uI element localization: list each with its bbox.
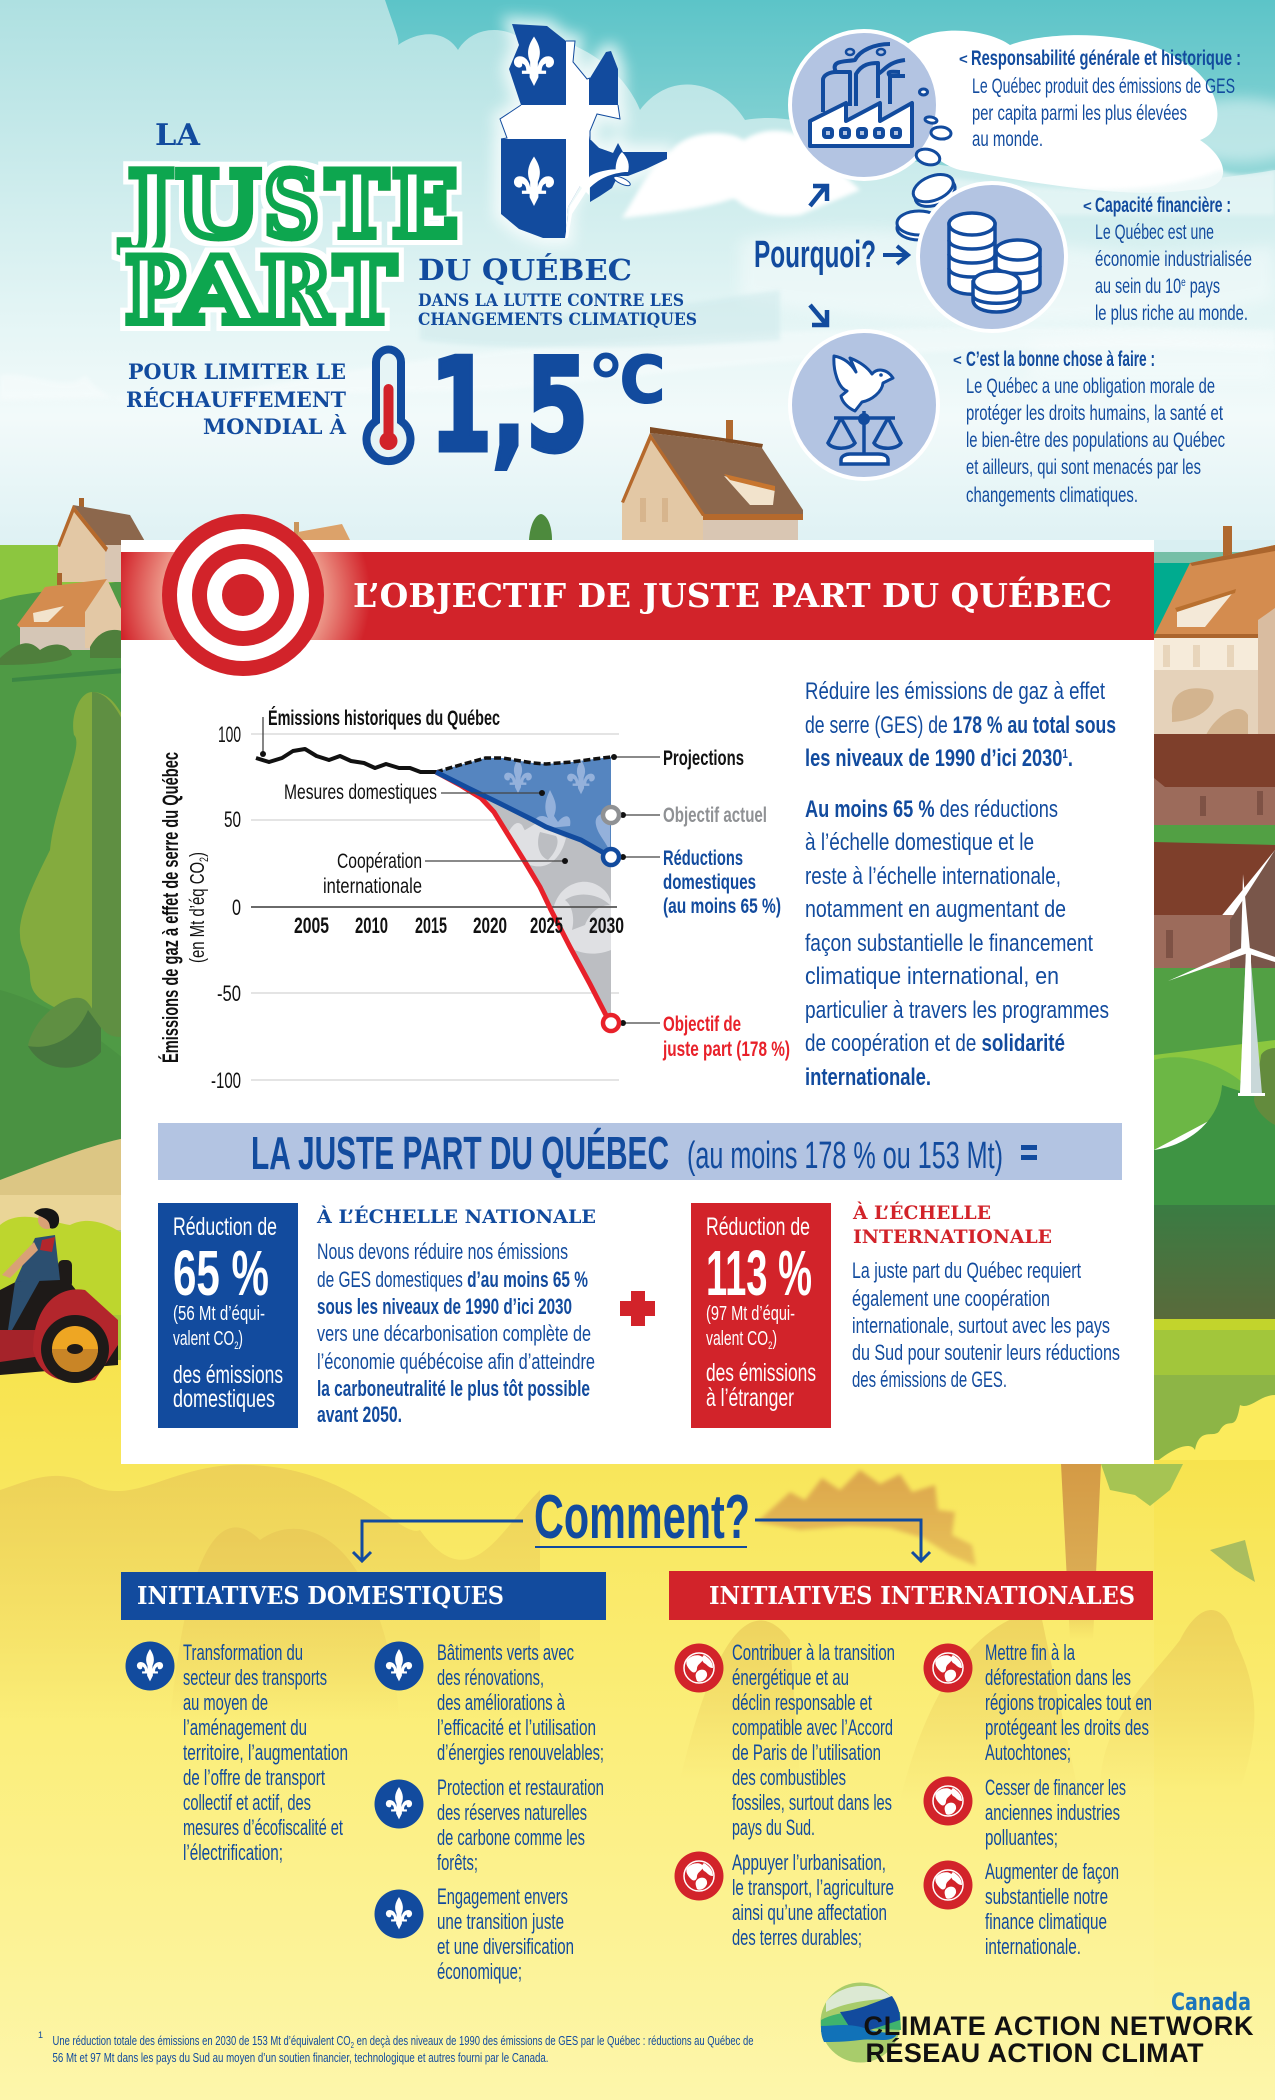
y axis values: -100 bbox=[211, 1068, 241, 1093]
right fields and farm bbox=[1150, 526, 1275, 1500]
text: transports: au moyen de bbox=[183, 1690, 268, 1715]
band: la juste part du québec: LA JUSTE PART DU QUÉBEC bbox=[251, 1127, 669, 1179]
text: transports: territoire, l’augmentation bbox=[183, 1740, 348, 1765]
text: responsabilité: au monde. bbox=[972, 128, 1043, 151]
title: part bbox=[125, 238, 396, 344]
footnote bbox=[38, 2030, 754, 2065]
line: projections bbox=[436, 757, 611, 772]
text: objective details: reste à l’échelle internationale, bbox=[805, 863, 1061, 890]
y axis values: -50 bbox=[217, 981, 241, 1006]
box: 65 % domestic: valent CO bbox=[173, 1328, 262, 1350]
arrow: to domestic initiatives bbox=[353, 1521, 523, 1561]
text: urbanisation: le transport, l’agriculture bbox=[732, 1875, 894, 1900]
text: transports: de l’offre de transport bbox=[183, 1765, 325, 1790]
icon: coin stacks circle bbox=[918, 183, 1066, 331]
house: central tan house bbox=[621, 420, 803, 540]
text: bâtiments verts bbox=[437, 1640, 604, 1765]
chart: emissions line chart: domestiques bbox=[663, 871, 756, 894]
text: à l'échelle nationale: la carboneutralité le plus tôt possible bbox=[317, 1376, 590, 1401]
text: objective details: Au moins 65 % des réductions bbox=[805, 796, 1058, 823]
box: 113 % abroad: des émissions bbox=[706, 1359, 816, 1387]
icon: fleur-de-lis 1 bbox=[126, 1642, 174, 1690]
chart: emissions line chart: Objectif actuel bbox=[663, 804, 767, 827]
y axis values: 100 bbox=[218, 722, 241, 747]
text: transports: l’électrification; bbox=[183, 1840, 283, 1865]
icon: Québec map flag bbox=[500, 24, 667, 238]
text: déforestation: Mettre fin à la bbox=[985, 1640, 1076, 1665]
text: transition énergétique bbox=[732, 1640, 895, 1840]
text: à l'échelle internationale: À L’ÉCHELLE bbox=[852, 1201, 991, 1224]
title: juste: J bbox=[120, 152, 174, 258]
icon: target bbox=[162, 514, 324, 676]
footnote: 56 Mt et 97 Mt dans les pays du Sud au moyen d’un soutien financier, technologique et autres fourni par le Canada. bbox=[52, 2051, 548, 2065]
header: initiatives internationales: INITIATIVES INTERNATIONALES bbox=[709, 1581, 1135, 1610]
logo text: RÉSEAU ACTION CLIMAT bbox=[866, 2037, 1204, 2068]
watermarks in chart bbox=[504, 759, 610, 852]
box: 113 % abroad: 2 bbox=[768, 1340, 772, 1352]
x axis years: 2020 bbox=[473, 913, 507, 938]
text: objective summary: les niveaux de 1990 d’ici 2030 bbox=[805, 745, 1144, 772]
text: à l'échelle internationale: internationale, surtout avec les pays bbox=[852, 1313, 1110, 1338]
text: transition juste: une transition juste bbox=[437, 1909, 564, 1934]
line: historical emissions bbox=[256, 749, 436, 772]
subtitle: dans la lutte: CHANGEMENTS CLIMATIQUES bbox=[418, 310, 697, 330]
banner heading: L’OBJECTIF DE JUSTE PART DU QUÉBEC bbox=[353, 575, 1112, 615]
band: la juste part du québec: (au moins 178 % ou 153 Mt) bbox=[687, 1135, 1003, 1177]
logo text: Canada bbox=[1171, 1988, 1251, 2016]
text: urbanisation: Appuyer l’urbanisation, bbox=[732, 1850, 886, 1875]
text: protection et restauration bbox=[437, 1775, 604, 1875]
box: 113 % abroad: Réduction de bbox=[706, 1213, 810, 1241]
text: à l'échelle internationale bbox=[852, 1201, 1120, 1392]
footnote: 2 bbox=[351, 2041, 354, 2050]
logo: Climate Action Network bbox=[820, 1982, 1254, 2068]
text: protection et restauration: Protection et restauration bbox=[437, 1775, 604, 1800]
box: 65 % domestic: Réduction de bbox=[173, 1213, 277, 1241]
text: déforestation: régions tropicales tout en bbox=[985, 1690, 1152, 1715]
bottom wheat field background bbox=[0, 1360, 1275, 2100]
footnote: 1 bbox=[38, 2030, 43, 2040]
text: objective summary: 1 bbox=[1062, 746, 1068, 761]
text: transports: secteur des transports bbox=[183, 1665, 327, 1690]
y axis title: ) bbox=[187, 852, 209, 857]
subtitle: du québec: DU QUÉBEC bbox=[418, 252, 632, 287]
x axis years: 2010 bbox=[355, 913, 388, 938]
text: à l'échelle internationale: également une coopération bbox=[852, 1286, 1050, 1311]
text: à l'échelle nationale: de GES domestiques d’au moins 65 % bbox=[317, 1267, 588, 1292]
text: transports: collectif et actif, des bbox=[183, 1790, 311, 1815]
icon: dove and scales circle bbox=[790, 331, 938, 479]
subtitle: dans la lutte bbox=[418, 291, 697, 330]
text: à l'échelle nationale: l’économie québécoise afin d’atteindre bbox=[317, 1349, 595, 1374]
text: capacité financière: < bbox=[1083, 198, 1092, 215]
text: déforestation: déforestation dans les bbox=[985, 1665, 1131, 1690]
icon: fleur-de-lis 3 bbox=[374, 1780, 424, 1828]
y axis values: 50 bbox=[224, 807, 241, 832]
red banner bbox=[121, 552, 1154, 640]
text: transition énergétique: déclin responsable et bbox=[732, 1690, 872, 1715]
text: industries polluantes: polluantes; bbox=[985, 1825, 1058, 1850]
chart: emissions line chart: Objectif de bbox=[663, 1013, 741, 1036]
title: juste: E bbox=[392, 152, 458, 258]
text: finance climatique bbox=[985, 1859, 1119, 1959]
icon: thermometer bbox=[367, 350, 411, 461]
chart: emissions line chart: Coopération bbox=[337, 850, 422, 873]
icon: coin trail bbox=[897, 89, 959, 240]
text: à l'échelle internationale: du Sud pour soutenir leurs réductions bbox=[852, 1340, 1120, 1365]
logo globe bbox=[820, 1982, 901, 2062]
box: 65 % domestic: domestiques bbox=[173, 1385, 275, 1413]
x axis years: 2030 bbox=[589, 913, 624, 938]
x axis years: 2005 bbox=[294, 913, 329, 938]
text: finance climatique: internationale. bbox=[985, 1934, 1081, 1959]
line: fair share target bbox=[436, 772, 610, 1023]
text: bonne chose à faire: < bbox=[953, 352, 962, 369]
text: objective summary: . bbox=[1068, 745, 1073, 772]
y axis title bbox=[158, 752, 211, 1063]
house: small roof behind panel bbox=[294, 522, 350, 540]
box: 65 % domestic: 65 % bbox=[173, 1237, 269, 1309]
text: objective details: notamment en augmentant de bbox=[805, 896, 1066, 923]
icon: plus sign bbox=[620, 1291, 655, 1326]
icon: globe 3 bbox=[924, 1644, 972, 1692]
text: transition énergétique: pays du Sud. bbox=[732, 1815, 815, 1840]
chart: emissions line chart: internationale bbox=[323, 875, 422, 898]
text: finance climatique: Augmenter de façon bbox=[985, 1859, 1119, 1884]
text: bâtiments verts: l’efficacité et l’utilisation bbox=[437, 1715, 596, 1740]
text: à l'échelle nationale: avant 2050. bbox=[317, 1402, 402, 1427]
icon: globe 5 bbox=[924, 1860, 972, 1910]
band: la juste part du québec bbox=[158, 1123, 1122, 1180]
text: à l'échelle nationale bbox=[316, 1205, 596, 1427]
title: juste bbox=[120, 152, 458, 258]
tree: top of tree behind panel bbox=[529, 514, 552, 540]
text: protection et restauration: de carbone comme les bbox=[437, 1825, 585, 1850]
icon: fleur-de-lis 2 bbox=[374, 1642, 424, 1690]
text: déforestation: Autochtones; bbox=[985, 1740, 1071, 1765]
header: initiatives domestiques bbox=[121, 1572, 606, 1620]
text: objective details: façon substantielle le financement bbox=[805, 930, 1093, 957]
text: industries polluantes: Cesser de financer les bbox=[985, 1775, 1126, 1800]
y axis title: Émissions de gaz à effet de serre du Québec bbox=[158, 752, 183, 1063]
text: objective details: internationale. bbox=[805, 1064, 931, 1091]
logo text bbox=[864, 1988, 1254, 2068]
text: déforestation: protégeant les droits des bbox=[985, 1715, 1149, 1740]
box: 113 % abroad bbox=[691, 1203, 831, 1428]
text: pour limiter: POUR LIMITER LE bbox=[128, 359, 346, 384]
text: pour limiter: RÉCHAUFFEMENT bbox=[126, 387, 346, 412]
box: 65 % domestic: ) bbox=[238, 1328, 243, 1350]
y axis title: (en Mt d’éq CO bbox=[187, 827, 209, 963]
x axis years bbox=[294, 913, 624, 938]
text: objective details: climatique international, en bbox=[805, 963, 1059, 990]
text: transports bbox=[183, 1640, 348, 1865]
text: finance climatique: finance climatique bbox=[985, 1909, 1107, 1934]
title: la: LA bbox=[155, 118, 201, 153]
chart: emissions line chart: Réductions bbox=[663, 847, 743, 870]
text: capacité financière: e bbox=[1181, 275, 1186, 289]
box: 113 % abroad: (97 Mt d’équi- bbox=[706, 1303, 795, 1325]
text: transition énergétique: des combustibles bbox=[732, 1765, 846, 1790]
text: bonne chose à faire: changements climatiques. bbox=[966, 484, 1138, 507]
text: transition énergétique: Contribuer à la transition bbox=[732, 1640, 895, 1665]
icon: factory circle bbox=[790, 31, 938, 179]
heading: Pourquoi: Pourquoi? bbox=[754, 234, 876, 276]
header: initiatives domestiques: INITIATIVES DOMESTIQUES bbox=[137, 1581, 504, 1610]
y axis values bbox=[211, 722, 241, 1093]
text: protection et restauration: forêts; bbox=[437, 1850, 478, 1875]
box: 65 % domestic bbox=[158, 1203, 298, 1428]
header: initiatives internationales bbox=[669, 1571, 1153, 1620]
y axis title: 2 bbox=[197, 857, 211, 862]
chart: emissions line chart bbox=[158, 707, 790, 1093]
logo text: CLIMATE ACTION NETWORK bbox=[864, 2011, 1254, 2041]
box: 113 % abroad: 113 % bbox=[706, 1237, 812, 1309]
arrow: to international initiatives bbox=[755, 1520, 930, 1561]
text: industries polluantes: anciennes industries bbox=[985, 1800, 1120, 1825]
icon: fleur-de-lis 4 bbox=[374, 1890, 424, 1938]
background: sky and clouds bbox=[0, 0, 1275, 580]
text: bâtiments verts: des améliorations à bbox=[437, 1690, 566, 1715]
box: 65 % domestic: 2 bbox=[234, 1340, 238, 1352]
box: 113 % abroad: ) bbox=[772, 1328, 777, 1350]
x axis years: 2025 bbox=[530, 913, 563, 938]
text: transition énergétique: de Paris de l’utilisation bbox=[732, 1740, 881, 1765]
footnote: Une réduction totale des émissions en 2030 de 153 Mt d’équivalent CO bbox=[52, 2034, 447, 2048]
text: à l'échelle nationale: vers une décarbonisation complète de bbox=[317, 1321, 591, 1346]
chart: emissions line chart: Mesures domestiques bbox=[284, 781, 437, 804]
y axis values: 0 bbox=[232, 895, 241, 920]
chart labels: Émissions historiques du Québec bbox=[268, 707, 500, 730]
arrow: to circle 3 bbox=[810, 305, 827, 325]
text: bonne chose à faire bbox=[953, 348, 1225, 507]
text: objective summary: de serre (GES) de 178 % au total sous bbox=[805, 712, 1116, 739]
text: urbanisation: ainsi qu’une affectation bbox=[732, 1900, 887, 1925]
chart: emissions line chart: juste part (178 %) bbox=[662, 1038, 790, 1061]
box: 113 % abroad: valent CO bbox=[706, 1328, 795, 1350]
icon: globe 4 bbox=[924, 1776, 972, 1826]
footnote: en deçà des niveaux de 1990 des émissions de GES par le Québec : réductions au Québec de bbox=[354, 2034, 754, 2048]
text: capacité financière: au sein du 10 bbox=[1095, 275, 1221, 298]
illustration: farmer on tractor bbox=[0, 1208, 118, 1383]
text: transition juste: Engagement envers bbox=[437, 1884, 568, 1909]
subtitle: dans la lutte: DANS LA LUTTE CONTRE LES bbox=[418, 291, 684, 311]
text: bâtiments verts: Bâtiments verts avec bbox=[437, 1640, 574, 1665]
icon: globe 2 bbox=[674, 1852, 724, 1900]
box: 65 % domestic: des émissions bbox=[173, 1361, 283, 1389]
text: pour limiter bbox=[126, 359, 347, 439]
text: capacité financière: pays bbox=[1186, 275, 1220, 298]
leader lines bbox=[263, 717, 660, 1023]
text: objective details bbox=[805, 796, 1109, 1091]
text: transports: l’aménagement du bbox=[183, 1715, 307, 1740]
text: à l'échelle nationale: sous les niveaux de 1990 d’ici 2030 bbox=[317, 1294, 572, 1319]
text: objective details: de coopération et de solidarité bbox=[805, 1030, 1065, 1057]
text: capacité financière: Le Québec est une bbox=[1095, 221, 1214, 244]
title: part: A bbox=[177, 238, 263, 344]
text: à l'échelle nationale: À L’ÉCHELLE NATIONALE bbox=[316, 1205, 596, 1228]
text: transition énergétique: compatible avec l’Accord bbox=[732, 1715, 893, 1740]
title: part: T bbox=[334, 238, 396, 344]
white main panel bbox=[121, 540, 1154, 1464]
text: bonne chose à faire: C’est la bonne chose à faire : bbox=[966, 348, 1155, 371]
text: déforestation bbox=[985, 1640, 1152, 1765]
text: transition juste: économique; bbox=[437, 1959, 522, 1984]
text: transports: Transformation du bbox=[183, 1640, 303, 1665]
text: à l'échelle internationale: des émissions de GES. bbox=[852, 1367, 1007, 1392]
text: responsabilité: per capita parmi les plus élevées bbox=[972, 102, 1187, 125]
title: part: R bbox=[260, 238, 333, 344]
arrow: to circle 1 bbox=[810, 186, 827, 206]
text: objective summary bbox=[805, 678, 1116, 772]
arrow: to circle 2 bbox=[883, 246, 908, 264]
box: 65 % domestic: (56 Mt d’équi- bbox=[173, 1303, 265, 1325]
text: à l'échelle nationale: Nous devons réduire nos émissions bbox=[317, 1239, 568, 1264]
heading: comment: Comment? bbox=[534, 1483, 750, 1552]
text: transition juste bbox=[437, 1884, 574, 1984]
end markers bbox=[603, 807, 619, 1031]
text: transition énergétique: énergétique et au bbox=[732, 1665, 849, 1690]
text: objective summary: Réduire les émissions de gaz à effet bbox=[805, 678, 1105, 705]
text: responsabilité bbox=[959, 47, 1241, 151]
text: urbanisation: des terres durables; bbox=[732, 1925, 862, 1950]
text: transition énergétique: fossiles, surtout dans les bbox=[732, 1790, 892, 1815]
chart: emissions line chart: (au moins 65 %) bbox=[663, 895, 781, 918]
title: part: P bbox=[125, 238, 185, 344]
text: pour limiter: MONDIAL À bbox=[203, 414, 347, 439]
text: industries polluantes bbox=[985, 1775, 1126, 1850]
chart: emissions line chart: Projections bbox=[663, 747, 744, 770]
tree: tall poplar bbox=[20, 692, 125, 1068]
text: responsabilité: < bbox=[959, 51, 968, 68]
line: domestic reductions bbox=[436, 772, 611, 857]
text: objective details: particulier à travers les programmes bbox=[805, 997, 1109, 1024]
house: left lower farmhouse bbox=[0, 573, 125, 682]
area: international cooperation bbox=[436, 772, 611, 1023]
text: capacité financière bbox=[1083, 194, 1252, 325]
house: left upper farmhouse bbox=[57, 498, 151, 582]
text: bâtiments verts: des rénovations, bbox=[437, 1665, 544, 1690]
icon: wind turbine bbox=[1168, 874, 1275, 1096]
big number: 1,5 °C: 1,5 bbox=[430, 332, 588, 481]
text: à l'échelle internationale: La juste part du Québec requiert bbox=[852, 1258, 1081, 1283]
big number: 1,5 °C: C bbox=[620, 344, 665, 418]
text: à l'échelle internationale: INTERNATIONALE bbox=[853, 1227, 1052, 1248]
text: objective details: à l’échelle domestique et le bbox=[805, 829, 1034, 856]
text: bâtiments verts: d’énergies renouvelables; bbox=[437, 1740, 604, 1765]
left fields bbox=[0, 545, 125, 1395]
text: finance climatique: substantielle notre bbox=[985, 1884, 1108, 1909]
text: transition juste: et une diversification bbox=[437, 1934, 574, 1959]
text: protection et restauration: des réserves naturelles bbox=[437, 1800, 587, 1825]
x axis years: 2015 bbox=[415, 913, 447, 938]
text: urbanisation bbox=[732, 1850, 894, 1950]
area: domestic measures bbox=[436, 757, 611, 857]
text: transports: mesures d’écofiscalité et bbox=[183, 1815, 343, 1840]
title: juste: U bbox=[176, 152, 260, 258]
title: juste: T bbox=[326, 152, 388, 258]
title: juste: S bbox=[264, 152, 319, 258]
box: 113 % abroad: à l’étranger bbox=[706, 1384, 794, 1412]
icon: globe 1 bbox=[674, 1644, 724, 1692]
